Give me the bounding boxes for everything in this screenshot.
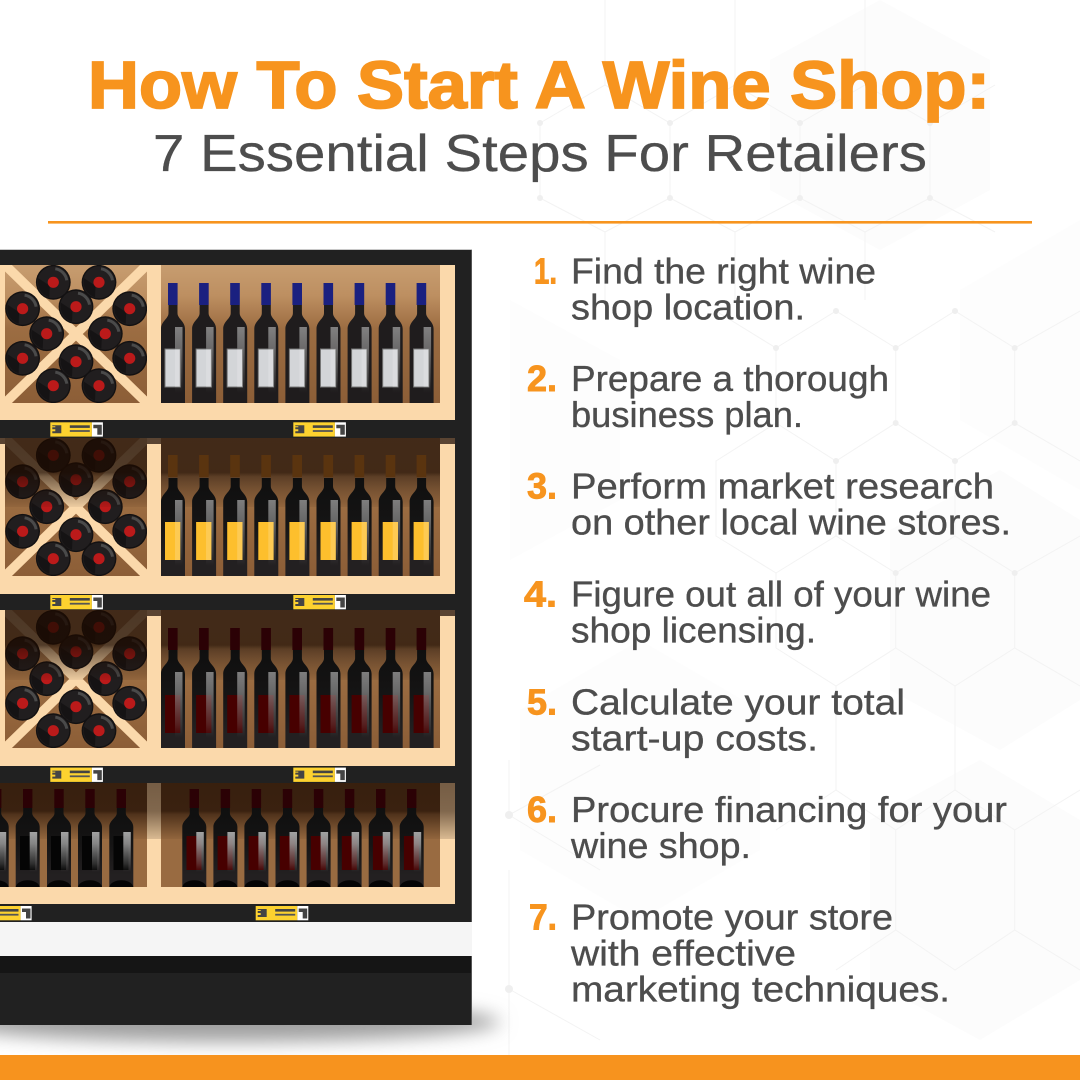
step 2: [527, 358, 889, 435]
step 5: [527, 682, 905, 758]
step 5: start-up costs.: [571, 718, 818, 758]
step 1: Find the right wine: [571, 250, 876, 292]
step 6: wine shop.: [570, 825, 751, 866]
shelf row 3: red label bottles: [0, 606, 455, 766]
step 7: [529, 896, 950, 1010]
shelf price tags: [0, 422, 346, 920]
cabinet frame: [0, 249, 472, 922]
background hexagon pattern: [505, 0, 1080, 1055]
cabinet base: [0, 922, 472, 1025]
step 3: on other local wine stores.: [571, 502, 1011, 542]
wine cabinet illustration: [0, 249, 472, 1025]
step 1: [534, 250, 876, 328]
shelf row 4: black and dark red label bottles: [0, 783, 455, 904]
step 2: Prepare a thorough: [571, 358, 889, 399]
step 6: Procure financing for your: [571, 789, 1007, 830]
step 7: 7.: [529, 896, 557, 938]
step 4: Figure out all of your wine: [571, 574, 991, 614]
subtitle: 7 Essential Steps For Retailers: [153, 125, 927, 183]
step 2: business plan.: [571, 394, 803, 435]
orange footer bar: [0, 1055, 1080, 1080]
step 6: [527, 789, 1007, 866]
step 7: marketing techniques.: [571, 968, 950, 1010]
step 4: shop licensing.: [571, 610, 816, 650]
step 5: Calculate your total: [571, 682, 905, 722]
step 3: [527, 466, 1011, 542]
shelf row 2: yellow label bottles: [0, 434, 455, 594]
title: How To Start A Wine Shop:: [88, 48, 990, 123]
step 5: 5.: [527, 682, 557, 722]
step 2: 2.: [527, 358, 557, 399]
step 1: 1.: [534, 250, 557, 292]
step 7: with effective: [570, 932, 796, 974]
step 1: shop location.: [571, 286, 805, 328]
step 4: 4.: [524, 574, 557, 614]
step 3: Perform market research: [571, 466, 994, 506]
shelf row 1: blue capped white label bottles: [0, 261, 455, 420]
step 7: Promote your store: [571, 896, 893, 938]
step 6: 6.: [527, 789, 557, 830]
floor shadow under wine cabinet: [0, 1002, 500, 1042]
step 4: [524, 574, 991, 650]
divider rule: [48, 221, 1032, 224]
step 3: 3.: [527, 466, 557, 506]
